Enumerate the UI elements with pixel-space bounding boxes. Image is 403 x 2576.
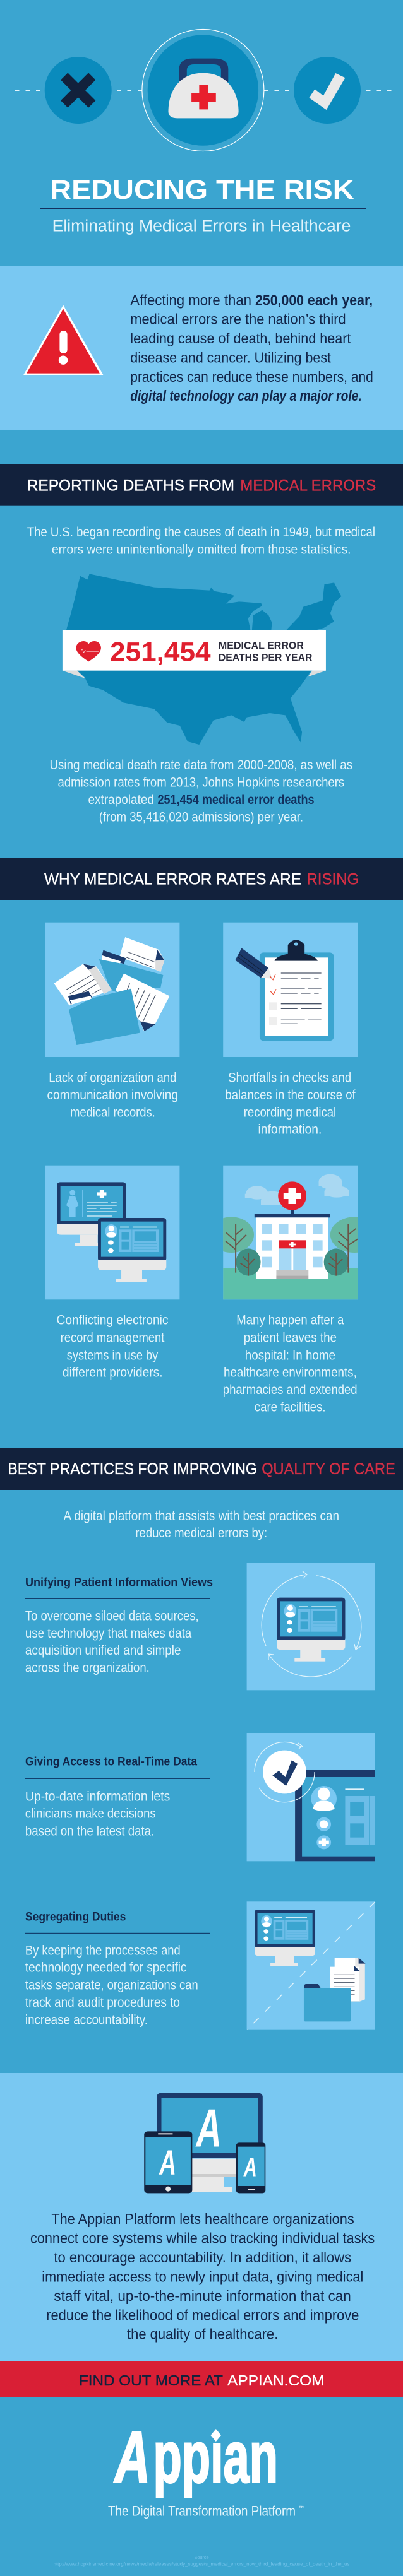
icon: monitor, tablet and phone: A	[159, 2142, 176, 2182]
text: checks and balances: balances in the course of	[225, 1088, 356, 1102]
body text	[25, 1609, 199, 1675]
icon: hospital	[223, 1174, 358, 1300]
icon: folders and papers	[54, 937, 170, 1045]
call to action band: FIND OUT MORE AT	[79, 2372, 223, 2389]
stat label	[219, 640, 312, 663]
map of the United States	[66, 574, 341, 745]
intro text: Affecting more than	[130, 292, 251, 308]
heading: best practices: QUALITY OF CARE	[262, 1460, 395, 1478]
text: conflicting systems: record management	[61, 1331, 165, 1345]
heading: reporting deaths	[0, 464, 403, 506]
body text: clinicians make decisions	[25, 1807, 156, 1821]
body text: acquisition unified and simple	[25, 1643, 181, 1658]
platform text: immediate access to newly input data, giving medical	[42, 2269, 363, 2285]
text: after leaving hospital: healthcare environments,	[224, 1366, 357, 1380]
text: after leaving hospital: patient leaves the	[244, 1331, 337, 1345]
body text: track and audit procedures to	[25, 1995, 180, 2010]
panel: checks and balances	[223, 923, 358, 1057]
body text: tasks separate, organizations can	[25, 1978, 198, 1992]
call to action band: APPIAN.COM	[227, 2372, 325, 2389]
text: reporting intro: errors were unintentionally omitted from those statistics.	[52, 542, 351, 557]
title rule	[40, 208, 366, 209]
source: Source	[195, 2556, 209, 2560]
body text: increase accountability.	[25, 2012, 148, 2027]
icon: monitor, tablet and phone: A	[195, 2099, 222, 2159]
text: conflicting systems: different providers.	[63, 1366, 163, 1380]
body text: Up-to-date information lets	[25, 1789, 170, 1804]
text: johns hopkins	[49, 758, 352, 825]
text: conflicting systems: Conflicting electronic	[57, 1313, 168, 1327]
panel: after leaving hospital	[223, 1165, 358, 1300]
icon: two monitors	[57, 1182, 166, 1282]
text: disorganized records: communication involving	[47, 1088, 178, 1102]
appian logo: ppian	[153, 2416, 278, 2498]
body text: across the organization.	[25, 1660, 150, 1675]
heading: reporting deaths: MEDICAL ERRORS	[240, 476, 376, 494]
intro text	[130, 292, 373, 404]
text: after leaving hospital: Many happen after a	[236, 1313, 344, 1327]
icon: check circle	[294, 57, 361, 124]
ribbon banner	[63, 630, 326, 678]
panel: appian platform	[0, 2073, 403, 2361]
body text: To overcome siloed data sources,	[25, 1609, 199, 1624]
text: best practices intro	[63, 1509, 339, 1540]
subheading: Unifying Patient Information Views	[25, 1576, 213, 1589]
appian logo: A	[114, 2416, 150, 2498]
icon: medical bag circle	[142, 29, 264, 151]
practice: real-time data	[25, 1733, 375, 1861]
heading: why rising	[0, 858, 403, 900]
body text	[25, 1789, 170, 1838]
panel: intro	[0, 266, 403, 430]
text: reporting intro	[27, 525, 375, 557]
icon: heart	[76, 641, 101, 661]
subheading: Segregating Duties	[25, 1910, 126, 1923]
call to action band	[0, 2361, 403, 2397]
platform text: to encourage accountability. In addition, it allows	[54, 2249, 351, 2266]
stat number: 251,454	[110, 637, 211, 667]
text: johns hopkins: (from 35,416,020 admissions) per year.	[99, 810, 303, 825]
text: checks and balances: information.	[258, 1123, 322, 1137]
intro text: disease and cancer. Utilizing best	[130, 349, 332, 365]
heading: why rising: RISING	[306, 870, 359, 888]
text: johns hopkins: admission rates from 2013, Johns Hopkins researchers	[58, 776, 344, 790]
logo diamond dot	[207, 2426, 225, 2443]
platform text: staff vital, up-to-the-minute information that can	[54, 2288, 351, 2304]
subheading: Giving Access to Real-Time Data	[25, 1756, 197, 1769]
practice: segregating duties	[25, 1901, 375, 2030]
hero illustration	[15, 29, 392, 151]
text: after leaving hospital: hospital: In home	[245, 1348, 335, 1362]
text: after leaving hospital: care facilities.	[255, 1400, 326, 1415]
stat label: DEATHS PER YEAR	[219, 652, 312, 663]
heading: why rising: WHY MEDICAL ERROR RATES ARE	[44, 870, 301, 888]
intro text: digital technology can play a major role.	[130, 387, 362, 404]
appian logo	[114, 2416, 278, 2498]
platform text: connect core systems while also tracking individual tasks	[30, 2230, 375, 2247]
heading: best practices: BEST PRACTICES FOR IMPROVING	[8, 1460, 257, 1478]
platform text	[30, 2211, 375, 2343]
text: after leaving hospital	[223, 1313, 358, 1415]
intro text: practices can reduce these numbers, and	[130, 369, 373, 385]
source	[54, 2556, 350, 2567]
body text: based on the latest data.	[25, 1824, 154, 1838]
intro text: medical errors are the nation’s third	[130, 311, 346, 328]
title: REDUCING THE RISK	[50, 175, 354, 205]
text: best practices intro: reduce medical errors by:	[135, 1526, 267, 1540]
body text: By keeping the processes and	[25, 1943, 181, 1958]
dashed connector line	[15, 90, 392, 91]
icon: clipboard and pencil	[235, 940, 334, 1041]
body text: use technology that makes data	[25, 1626, 191, 1641]
text: disorganized records	[47, 1070, 178, 1120]
panel: conflicting systems	[45, 1166, 179, 1299]
text: checks and balances: Shortfalls in checks and	[228, 1070, 351, 1085]
source: http://www.hopkinsmedicine.org/news/media/releases/study_suggests_medical_errors_now_third_leading_cause_of_death_in_the_us	[54, 2563, 350, 2567]
text: conflicting systems	[57, 1313, 168, 1380]
text: disorganized records: medical records.	[70, 1105, 155, 1120]
text: best practices intro: A digital platform that assists with best practices can	[63, 1509, 339, 1523]
heading: best practices	[0, 1448, 403, 1490]
tagline: ™	[298, 2505, 305, 2511]
platform text: The Appian Platform lets healthcare organizations	[51, 2211, 354, 2227]
heading: reporting deaths: REPORTING DEATHS FROM	[27, 476, 234, 494]
tagline: The Digital Transformation Platform	[108, 2503, 296, 2519]
US map with stat banner	[63, 574, 341, 745]
text: johns hopkins: Using medical death rate data from 2000-2008, as well as	[49, 758, 352, 772]
text: disorganized records: Lack of organization and	[49, 1070, 177, 1085]
icon: warning triangle	[23, 305, 104, 375]
platform text: reduce the likelihood of medical errors and improve	[46, 2307, 359, 2324]
body text	[25, 1943, 198, 2027]
illustration: checkmark and cropped monitor	[247, 1733, 375, 1861]
body text: technology needed for specific	[25, 1961, 186, 1975]
text: checks and balances	[225, 1070, 356, 1137]
platform text: the quality of healthcare.	[127, 2326, 278, 2343]
icon: monitor, tablet and phone	[144, 2093, 265, 2193]
panel: disorganized records	[45, 923, 179, 1057]
stat label: MEDICAL ERROR	[219, 640, 304, 651]
icon: monitor, tablet and phone: A	[243, 2152, 257, 2182]
icon: X circle	[45, 57, 112, 124]
text: after leaving hospital: pharmacies and extended	[223, 1383, 358, 1397]
practice: unifying views	[25, 1563, 375, 1690]
intro text: leading cause of death, behind heart	[130, 330, 351, 346]
intro text: 250,000 each year,	[255, 292, 373, 308]
subtitle: Eliminating Medical Errors in Healthcare	[52, 218, 351, 235]
text: johns hopkins: extrapolated	[88, 793, 154, 807]
text: checks and balances: recording medical	[244, 1105, 336, 1120]
illustration: monitor and documents split by diagonal	[247, 1901, 375, 2030]
text: johns hopkins: 251,454 medical error deaths	[158, 793, 315, 807]
illustration: monitor with cycle arrows	[247, 1563, 375, 1690]
text: conflicting systems: systems in use by	[67, 1348, 159, 1362]
